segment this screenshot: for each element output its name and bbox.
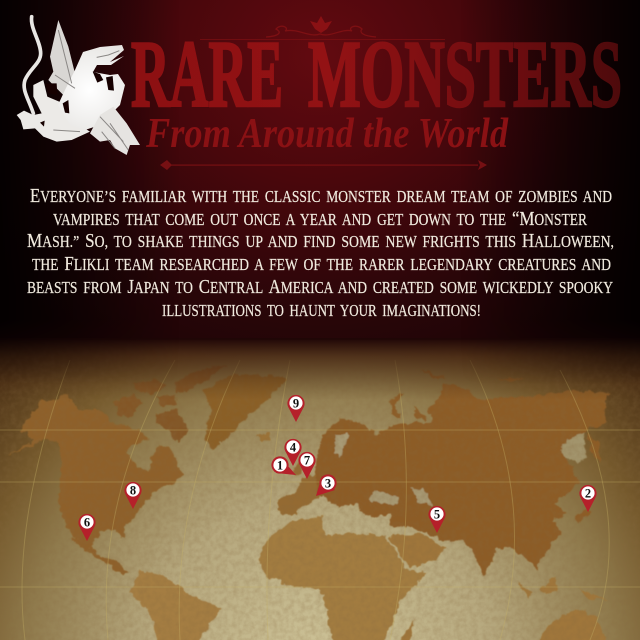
title: Rare Monsters: [131, 21, 622, 127]
pin 2: [579, 485, 597, 512]
pin 9: [287, 395, 305, 422]
small creature and lower head: [17, 80, 90, 142]
map pins: [78, 395, 597, 541]
side vignette: [0, 0, 640, 376]
pin 4: [284, 439, 302, 466]
pin 8: [124, 482, 142, 509]
line 3: MASH.” SO, TO SHAKE THINGS UP AND FIND SOME NEW FRIGHTS THIS HALLOWEEN,: [27, 230, 614, 252]
pin 7: [298, 452, 316, 479]
land masses west: [8, 365, 323, 640]
pin 6: [78, 514, 96, 541]
pin 1: 1: [277, 458, 283, 472]
pin 2: 2: [585, 486, 591, 500]
pin 3: [316, 474, 337, 496]
subtitle: From Around the World: From Around the World: [145, 111, 509, 157]
header and intro background: [0, 0, 640, 370]
pin 7: 7: [304, 454, 310, 468]
pin 3: 3: [325, 476, 331, 490]
lower wing: [90, 107, 140, 155]
pin 9: 9: [293, 396, 299, 410]
dark gaps: [40, 72, 114, 127]
pin 6: 6: [84, 516, 90, 530]
upper wing: [48, 20, 77, 95]
tail: [24, 17, 41, 113]
pin 5: [428, 506, 446, 533]
map panel: [0, 338, 640, 640]
pin 1: [271, 456, 296, 475]
intro paragraph: [27, 185, 614, 320]
ornament above title: [200, 16, 445, 40]
line 6: ILLUSTRATIONS TO HAUNT YOUR IMAGINATIONS!: [162, 301, 481, 320]
shading: [53, 30, 128, 150]
title: Rare Monsters: RARE: [131, 21, 283, 127]
icon: white dragon: [17, 17, 140, 155]
pin 5: 5: [434, 508, 440, 522]
land masses east: [315, 368, 608, 640]
line 2: VAMPIRES THAT COME OUT ONCE A YEAR AND GET DOWN TO THE “MONSTER: [53, 208, 587, 230]
divider arrow: [160, 160, 487, 170]
pin 4: 4: [290, 440, 297, 454]
body and neck: [58, 45, 125, 130]
pin 8: 8: [130, 484, 136, 498]
map texture and grid: [0, 340, 640, 640]
